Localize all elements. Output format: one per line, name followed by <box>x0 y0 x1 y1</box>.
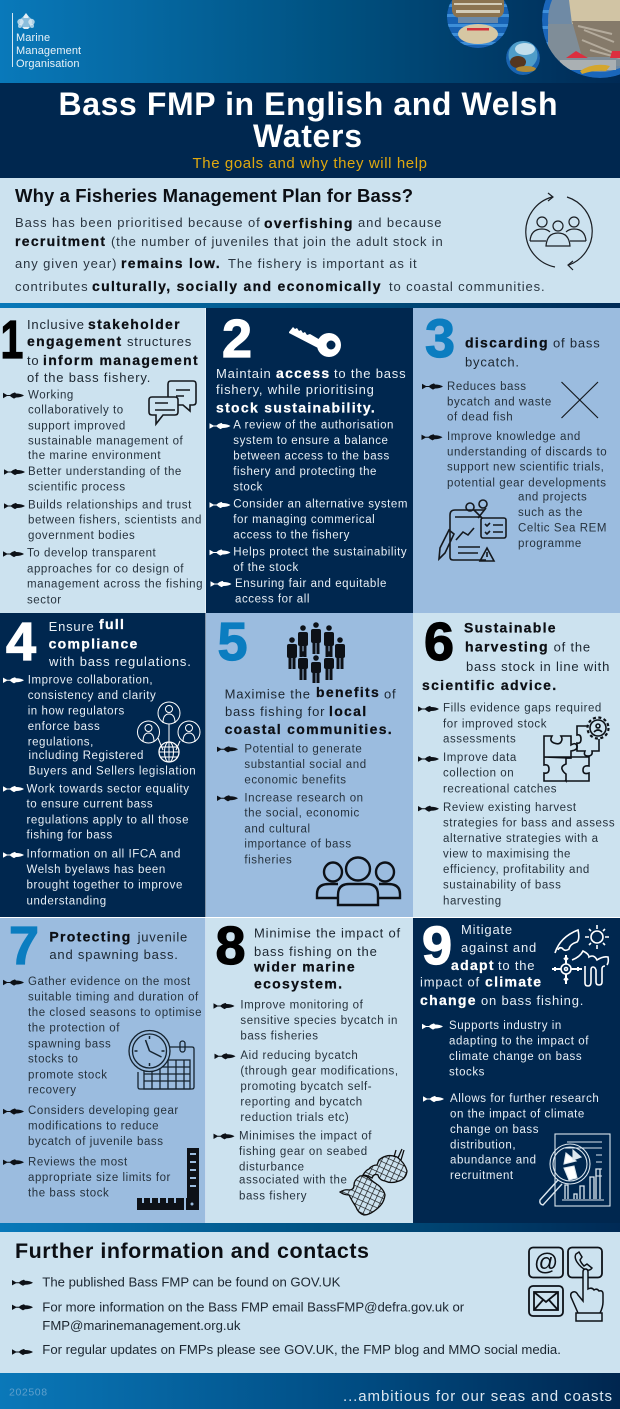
goal 6 list: alternative strategies with a <box>443 833 599 845</box>
icon: contact buttons: @ <box>534 1249 558 1276</box>
goal 5 list: Potential to generate <box>244 744 362 756</box>
photo: reef circle <box>506 40 540 75</box>
subtitle: The goals and why they will help <box>192 155 427 172</box>
goal 2 list: A review of the authorisation <box>233 419 394 431</box>
goal 7 heading: juvenile <box>137 930 188 945</box>
bullets panel 7 <box>3 979 24 1165</box>
icon: report and magnifier <box>540 1134 610 1206</box>
goal 9 list: change on bass <box>450 1124 539 1136</box>
goal 4 list: Improve collaboration, <box>28 675 153 687</box>
goal 9 heading: Mitigate <box>461 922 513 937</box>
panel 5: local communities <box>206 612 413 917</box>
goal 7 list: promote stock <box>28 1069 108 1081</box>
goal 9 heading: change <box>420 992 477 1008</box>
goal 5 list: Increase research on <box>244 792 364 804</box>
goal 4 heading: with bass regulations. <box>48 654 192 669</box>
goal 1 list: Better understanding of the <box>28 466 182 478</box>
intro heading: Why a Fisheries Management Plan for Bass? <box>15 185 413 206</box>
goal 5 list: the social, economic <box>244 808 360 820</box>
icon: community cycle <box>526 193 592 270</box>
goal 4 list: enforce bass <box>28 721 100 733</box>
goal 2 list: access to the fishery <box>233 529 350 541</box>
bullets panel 3 <box>422 383 443 440</box>
goal 2 list: Consider an alternative system <box>233 498 408 510</box>
contacts list: For more information on the Bass FMP email BassFMP@defra.gov.uk or <box>42 1300 465 1314</box>
goal 9 heading: to the <box>498 958 535 973</box>
goal 9 heading: on bass fishing. <box>481 993 584 1008</box>
goal 2 list: of the stock <box>233 562 299 574</box>
goal 3 list: support new scientific trials, <box>447 462 604 474</box>
goal 1 list: To develop transparent <box>27 548 157 560</box>
goal 1 list: management across the fishing <box>27 579 203 591</box>
goal 2 heading: Maintain <box>216 366 272 381</box>
goal 5 list: and cultural <box>244 823 311 835</box>
goal 3 list: understanding of discards to <box>447 446 607 458</box>
goal 5 heading: local <box>329 703 367 719</box>
panel 9: climate change <box>413 916 620 1223</box>
goal 6 list: collection on <box>443 768 514 780</box>
panel: why a fisheries management plan <box>0 178 620 303</box>
goal 3 list: such as the <box>518 507 583 519</box>
panel 2: access <box>206 308 413 613</box>
number 9: 9 <box>422 916 452 976</box>
goal 6 heading: of the <box>554 640 591 655</box>
goal 6 list: efficiency, profitability and <box>443 864 590 876</box>
goal 7 list: stocks to <box>28 1054 78 1066</box>
goal 7 heading: Protecting <box>49 929 132 945</box>
goal 8 heading: Minimise the impact of <box>254 926 401 941</box>
goal 2 list: between access to the bass <box>233 451 390 463</box>
goal 8 list: Aid reducing bycatch <box>240 1050 358 1062</box>
goal 4 list: Welsh byelaws has been <box>26 864 166 876</box>
goal 2 list: stock <box>233 482 263 494</box>
goal 3 list: Reduces bass <box>447 381 527 393</box>
goal 3 list: potential gear developments <box>447 477 607 489</box>
goal 1 heading: inform management <box>43 352 199 368</box>
icon: clock and calendar <box>129 1030 194 1089</box>
goal 3 heading: discarding <box>465 334 549 350</box>
goal 9 heading: adapt <box>451 957 495 973</box>
goal 2 list: access for all <box>235 594 310 606</box>
intro text: (the number of juveniles that join the adult stock in <box>111 234 444 249</box>
goal 6 list: for improved stock <box>443 718 547 730</box>
goal 4 list: regulations apply to all those <box>26 814 189 826</box>
goal 3 list: Improve knowledge and <box>447 431 581 443</box>
goal 3 list: Celtic Sea REM <box>518 522 607 534</box>
icon: jigsaw and gear <box>544 718 608 781</box>
goal 6 list: Review existing harvest <box>443 802 577 814</box>
goal 8 list: sensitive species bycatch in <box>240 1015 398 1027</box>
goal 4 list: Information on all IFCA and <box>26 849 181 861</box>
icon: royal crest <box>17 13 35 29</box>
goal 8 list: fishing gear on seabed <box>239 1146 368 1158</box>
goal 6 list: Improve data <box>443 752 517 764</box>
goal 1 list: collaboratively to <box>28 405 124 417</box>
icon: cross <box>562 382 598 418</box>
goal 1 heading: structures <box>127 334 192 349</box>
goal 9 heading: impact of <box>420 975 480 990</box>
goal 1 heading: stakeholder <box>88 316 181 332</box>
goal 8 heading: wider marine <box>253 959 356 975</box>
goal 2 heading: access <box>276 365 331 381</box>
goal 5 list: substantial social and <box>244 759 367 771</box>
goal 8 list: Improve monitoring of <box>240 999 364 1011</box>
goal 6 heading: Sustainable <box>464 619 557 635</box>
goal 9 heading: against and <box>461 940 537 955</box>
intro text: Bass has been prioritised because of <box>15 215 261 230</box>
goal 5 heading: of <box>384 686 396 701</box>
number 2: 2 <box>222 309 252 369</box>
goal 1 list: support improved <box>28 420 126 432</box>
panel 3: discarding <box>413 308 620 613</box>
goal 4 list: Work towards sector equality <box>26 783 190 795</box>
intro text: to coastal communities. <box>389 279 546 294</box>
panel: further information and contacts <box>0 1232 620 1373</box>
logo: Marine Management Organisation <box>12 13 81 70</box>
goal 5 heading: coastal communities. <box>225 721 393 737</box>
goal 3 heading: of bass <box>553 335 601 350</box>
goal 4 list: regulations, <box>28 737 94 749</box>
intro text: remains low. <box>121 255 221 271</box>
title: Bass FMP in English and Welsh <box>58 86 558 122</box>
number 1: 1 <box>0 311 23 370</box>
goal 1 list: between fishers, scientists and <box>28 515 202 527</box>
goal 7 heading: and spawning bass. <box>49 947 179 962</box>
goal 4 list: understanding <box>26 895 107 907</box>
goal 9 list: Supports industry in <box>449 1020 562 1032</box>
bullets contacts <box>12 1280 33 1355</box>
gradient strip <box>0 1223 620 1232</box>
icon: fishing net <box>340 1149 407 1215</box>
title: Waters <box>253 118 362 154</box>
photo: harbour circle <box>447 0 509 48</box>
goal 4 list: to ensure current bass <box>26 799 153 811</box>
goal 1 list: sustainable management of <box>28 436 184 448</box>
intro text: recruitment <box>15 233 106 249</box>
goal 8 list: reduction trials etc) <box>240 1112 349 1124</box>
header banner <box>0 0 620 83</box>
goal 3 list: programme <box>518 538 582 550</box>
bullets panel 5 <box>217 746 238 801</box>
goal 8 heading: ecosystem. <box>254 975 343 991</box>
goal 9 list: abundance and <box>450 1155 537 1167</box>
icon: contact buttons <box>529 1248 603 1321</box>
goal 5 heading: bass fishing for <box>225 704 325 719</box>
goal 2 heading: fishery, while prioritising <box>216 382 375 397</box>
bullets panel 4 <box>3 677 24 858</box>
goal 9 list: adapting to the impact of <box>449 1035 589 1047</box>
bullets panel 9 <box>422 1023 444 1102</box>
goal 7 list: the bass stock <box>28 1187 109 1199</box>
goal 4 heading: full <box>99 616 125 632</box>
intro text: contributes <box>15 279 88 294</box>
goal 9 heading: climate <box>485 974 542 990</box>
icon: connected people and globe <box>138 702 200 762</box>
goal 6 list: harvesting <box>443 895 502 907</box>
goal 7 list: bycatch of juvenile bass <box>28 1136 164 1148</box>
goal 3 list: of dead fish <box>447 412 513 424</box>
strapline: ...ambitious for our seas and coasts <box>343 1388 612 1405</box>
goal 4 list: consistency and clarity <box>28 690 156 702</box>
goal 5 heading: benefits <box>316 684 380 700</box>
goal 1 heading: to <box>27 353 39 368</box>
goal 7 list: suitable timing and duration of <box>28 992 199 1004</box>
goal 1 list: the marine environment <box>28 450 161 462</box>
goal 8 list: disturbance <box>239 1161 305 1173</box>
panel 4: compliance <box>0 612 206 917</box>
number 3: 3 <box>425 309 455 369</box>
title band <box>0 83 620 178</box>
goal 1 list: scientific process <box>28 482 126 494</box>
goal 6 list: assessments <box>443 734 516 746</box>
gradient strip <box>0 303 620 308</box>
goal 5 list: fisheries <box>244 854 292 866</box>
goal 9 list: recruitment <box>450 1170 514 1182</box>
panel 8: wider marine ecosystem <box>206 916 413 1223</box>
intro text: and because <box>358 215 442 230</box>
panel 1: stakeholder engagement <box>0 308 206 613</box>
goal 1 heading: of the bass fishery. <box>27 370 151 385</box>
contacts heading: Further information and contacts <box>15 1239 369 1263</box>
goal 4 list: fishing for bass <box>26 830 113 842</box>
goal 4 list: Buyers and Sellers legislation <box>28 766 196 778</box>
goal 9 list: distribution, <box>450 1140 516 1152</box>
contacts list: FMP@marinemanagement.org.uk <box>42 1318 241 1333</box>
goal 7 list: Considers developing gear <box>28 1105 179 1117</box>
goal 9 list: Allows for further research <box>450 1093 599 1105</box>
goal 6 heading: bass stock in line with <box>466 659 610 674</box>
goal 5 list: importance of bass <box>244 839 352 851</box>
intro text: culturally, socially and economically <box>92 278 382 294</box>
bullets panel 6 <box>418 706 439 812</box>
icon: key <box>289 327 341 357</box>
goal 2 heading: stock sustainability. <box>216 400 376 416</box>
goal 8 list: associated with the <box>239 1175 347 1187</box>
print code: 202508 <box>9 1386 48 1398</box>
goal 1 heading: Inclusive <box>27 317 85 332</box>
goal 6 list: view to maximising the <box>443 849 571 861</box>
number 6: 6 <box>424 612 454 672</box>
goal 6 list: recreational catches <box>443 783 557 795</box>
contacts list: For regular updates on FMPs please see GOV.UK, the FMP blog and MMO social media. <box>42 1342 561 1357</box>
goal 4 heading: Ensure <box>49 619 95 634</box>
panel 7: protecting juvenile bass <box>0 916 206 1223</box>
goal 3 heading: bycatch. <box>465 355 520 370</box>
goal 7 list: modifications to reduce <box>28 1121 159 1133</box>
goal 5 list: economic benefits <box>244 775 347 787</box>
icon: report and tools <box>439 500 506 561</box>
icon: crowd of people <box>287 622 345 683</box>
goal 8 list: promoting bycatch self- <box>240 1081 372 1093</box>
icon: climate globe, sun and snowflake <box>552 925 609 986</box>
goal 2 heading: to the bass <box>334 366 406 381</box>
goal 7 list: recovery <box>28 1085 77 1097</box>
bullets panel 8 <box>214 1003 236 1139</box>
intro text: overfishing <box>264 215 354 231</box>
goal 1 heading: engagement <box>27 333 122 349</box>
icon: group of three people <box>317 858 400 905</box>
goal 7 list: Reviews the most <box>28 1156 128 1168</box>
goal 1 list: Working <box>28 389 74 401</box>
intro text: The fishery is important as it <box>228 256 418 271</box>
goal 1 list: sector <box>27 594 62 606</box>
number 7: 7 <box>9 916 39 976</box>
number 5: 5 <box>218 612 248 672</box>
goal 4 list: brought together to improve <box>26 880 183 892</box>
intro text: any given year) <box>15 256 117 271</box>
goal 6 list: Fills evidence gaps required <box>443 703 602 715</box>
goal 5 heading: Maximise the <box>225 686 311 701</box>
goal 7 list: the closed seasons to optimise <box>28 1007 202 1019</box>
goal 8 heading: bass fishing on the <box>254 944 378 959</box>
contacts list: The published Bass FMP can be found on GOV.UK <box>42 1275 341 1290</box>
goal 6 list: strategies for bass and assess <box>443 818 615 830</box>
goal 8 list: reporting and bycatch <box>240 1097 363 1109</box>
goal 7 list: spawning bass <box>28 1038 111 1050</box>
goal 9 list: on the impact of climate <box>450 1109 585 1121</box>
goal 2 list: Helps protect the sustainability <box>233 546 407 558</box>
goal 8 list: (through gear modifications, <box>240 1066 399 1078</box>
bullets panel 2 <box>210 423 232 587</box>
goal 6 list: sustainability of bass <box>443 880 561 892</box>
goal 2 list: Ensuring fair and equitable <box>235 578 387 590</box>
goal 2 list: for managing commerical <box>233 514 375 526</box>
goal 6 heading: scientific advice. <box>422 677 557 693</box>
goal 4 heading: compliance <box>49 635 139 651</box>
icon: ruler <box>137 1148 199 1210</box>
goal 2 list: fishery and protecting the <box>233 466 377 478</box>
goal 8 list: Minimises the impact of <box>239 1130 372 1142</box>
logo: Marine Management Organisation: Management <box>16 45 81 57</box>
bullets panel 1 <box>3 392 25 557</box>
icon: speech bubbles <box>149 381 196 424</box>
photo: fishing net circle <box>542 0 620 78</box>
goal 1 list: approaches for co design of <box>27 563 184 575</box>
goal 9 list: climate change on bass <box>449 1051 582 1063</box>
goal 8 list: bass fisheries <box>240 1030 319 1042</box>
goal 3 list: bycatch and waste <box>447 396 552 408</box>
goal 7 list: appropriate size limits for <box>28 1172 171 1184</box>
number 8: 8 <box>216 916 246 976</box>
panel 6: sustainable harvesting <box>413 612 620 917</box>
goal 7 list: the protection of <box>28 1023 120 1035</box>
logo: Marine Management Organisation: Marine <box>16 32 50 44</box>
goal 3 list: and projects <box>518 492 587 504</box>
goal 8 list: bass fishery <box>239 1190 307 1202</box>
footer band <box>0 1373 620 1409</box>
goal 1 list: government bodies <box>28 530 135 542</box>
goal 1 list: Builds relationships and trust <box>28 499 192 511</box>
number 4: 4 <box>6 612 36 672</box>
goal 7 list: Gather evidence on the most <box>28 976 191 988</box>
goal 2 list: system to ensure a balance <box>233 435 389 447</box>
goal 9 list: stocks <box>449 1066 485 1078</box>
goal 4 list: in how regulators <box>28 706 125 718</box>
goal 6 heading: harvesting <box>465 639 549 655</box>
logo: Marine Management Organisation: Organisation <box>16 58 80 70</box>
goal 4 list: including Registered <box>28 750 144 762</box>
